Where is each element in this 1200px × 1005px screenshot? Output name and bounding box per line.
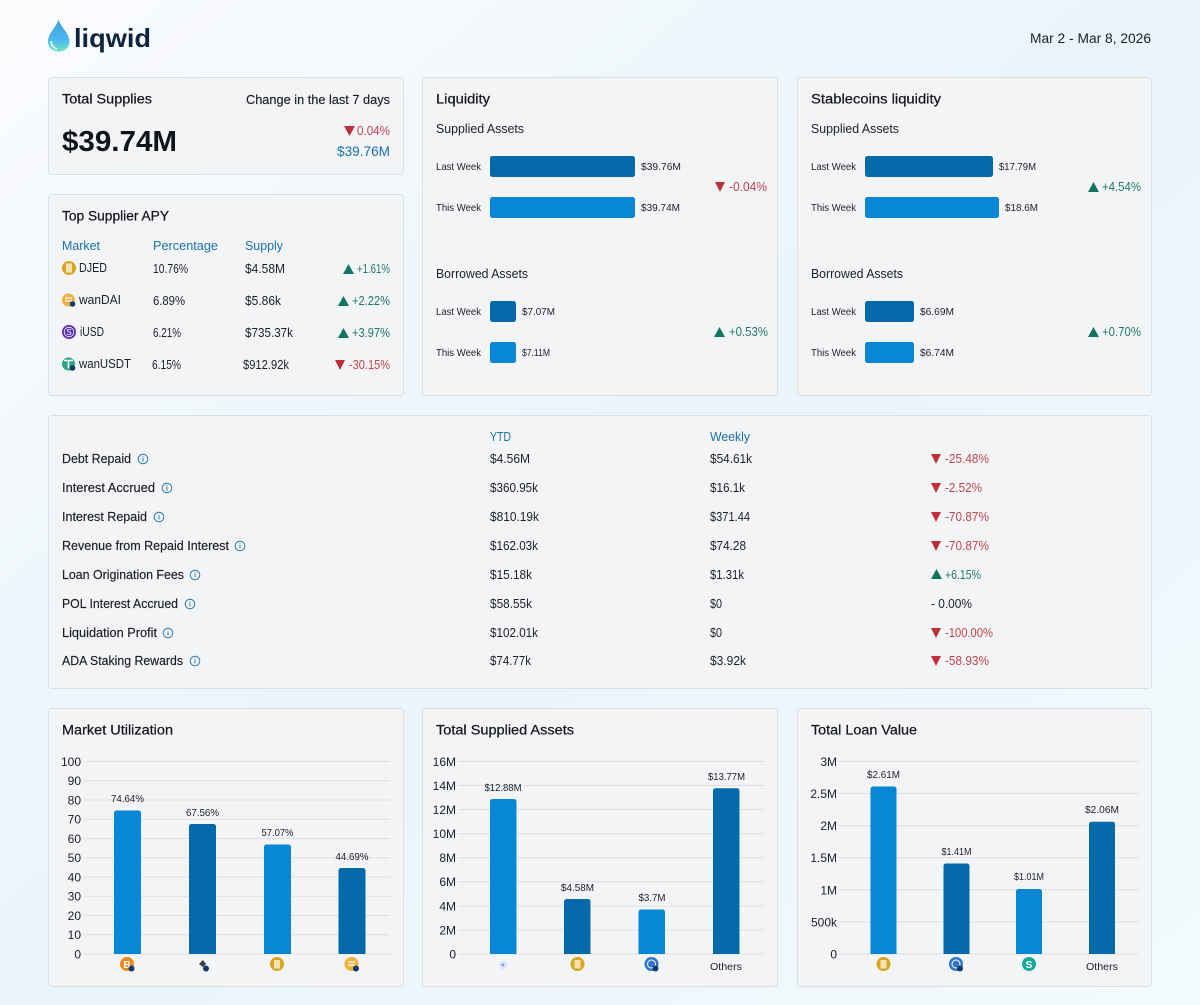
row: wanUSDT: $912.92k	[243, 358, 290, 372]
row: wanDAI: +2.22%	[352, 294, 390, 308]
row: ADA staking rewards: $3.92k	[710, 654, 747, 668]
row: DJED	[62, 261, 390, 276]
bar chart: market utilization: 60	[68, 832, 81, 846]
bar chart: total supplied assets: 14M	[433, 779, 456, 793]
x-axis token icons and label: Others	[710, 961, 742, 973]
x-axis token icons and label: Others	[1086, 961, 1118, 973]
row: revenue from repaid interest	[62, 539, 989, 553]
row: wanUSDT	[62, 357, 390, 372]
change: supplied	[1088, 180, 1141, 194]
change down	[344, 124, 390, 138]
row: wanDAI: 6.89%	[153, 294, 185, 308]
bar chart: market utilization: 80	[68, 794, 81, 808]
icon: water drop	[48, 19, 70, 52]
bar chart: total supplied assets	[433, 755, 764, 973]
row: iUSD: +3.97%	[352, 326, 390, 340]
bar chart: market utilization: 90	[68, 774, 81, 788]
panel: liquidity	[422, 78, 778, 396]
change: borrowed: +0.53%	[729, 325, 768, 339]
previous value: $39.76M	[337, 143, 390, 159]
bar chart: total loan value: $2.61M	[867, 769, 900, 781]
bar chart: total supplied assets: 2M	[439, 924, 456, 938]
row: interest accrued: Interest Accrued	[62, 481, 155, 495]
row: POL interest accrued: POL Interest Accrued	[62, 597, 178, 611]
bar: supplied last week: $17.79M	[999, 161, 1036, 173]
row: DJED: +1.61%	[357, 262, 390, 276]
row: loan origination fees	[62, 568, 981, 582]
row: ADA staking rewards	[62, 654, 989, 668]
bar chart: market utilization	[61, 755, 390, 972]
row: wanDAI: wanDAI	[78, 293, 121, 307]
bar: borrowed last week: Last Week	[811, 306, 857, 318]
sub-heading: borrowed assets: Borrowed Assets	[436, 267, 528, 281]
bar: supplied this week: This Week	[811, 202, 857, 214]
bar chart: total supplied assets: $13.77M	[708, 771, 745, 783]
row: wanUSDT: wanUSDT	[78, 357, 131, 371]
bar: borrowed last week: $6.69M	[920, 306, 954, 318]
bar chart: total loan value: $1.01M	[1014, 871, 1044, 883]
bar chart: market utilization: 44.69%	[336, 851, 368, 863]
bar: supplied last week: Last Week	[436, 161, 482, 173]
row: interest accrued	[62, 481, 982, 495]
bar: supplied last week: Last Week	[811, 161, 857, 173]
heading: Total Supplied Assets	[436, 722, 574, 738]
column headers	[490, 430, 751, 444]
bar chart: market utilization: 100	[61, 755, 81, 769]
bar chart: total loan value: 3M	[820, 755, 837, 769]
bar chart: market utilization: 50	[68, 851, 81, 865]
bar chart: market utilization: 67.56%	[186, 807, 219, 819]
table header: Supply	[245, 239, 284, 253]
row: interest repaid: $371.44	[710, 510, 750, 524]
change: supplied: -0.04%	[729, 180, 767, 194]
row: iUSD: iUSD	[80, 325, 104, 339]
row: revenue from repaid interest: Revenue from Repaid Interest	[62, 539, 230, 553]
panel: total supplies	[48, 78, 404, 174]
row: revenue from repaid interest: -70.87%	[945, 539, 989, 553]
bar chart: market utilization: 0	[74, 948, 81, 962]
row: iUSD: 6.21%	[153, 326, 181, 340]
bar chart: total loan value: 500k	[811, 916, 838, 930]
row: iUSD: $735.37k	[245, 326, 294, 340]
bar chart: total supplied assets: 12M	[433, 803, 456, 817]
bar: supplied last week: $39.76M	[641, 161, 681, 173]
row: interest repaid: -70.87%	[945, 510, 989, 524]
total supplies value: $39.74M	[62, 126, 177, 158]
bar: borrowed this week: $7.11M	[522, 347, 550, 359]
bar: borrowed last week: $7.07M	[522, 306, 555, 318]
bar: supplied this week	[436, 197, 680, 218]
row: POL interest accrued	[62, 597, 972, 611]
row: loan origination fees: +6.15%	[945, 568, 981, 582]
bar chart: market utilization: 10	[68, 928, 81, 942]
heading: Top Supplier APY	[62, 208, 169, 224]
table header	[62, 239, 284, 253]
bar: borrowed last week: Last Week	[436, 306, 482, 318]
bar: supplied this week	[811, 197, 1038, 218]
bar chart: total supplied assets: 16M	[433, 755, 456, 769]
bar chart: total supplied assets: 6M	[439, 875, 456, 889]
bar chart: total loan value: 2.5M	[810, 787, 837, 801]
table header: Market	[62, 239, 101, 253]
x-axis token icons and label: S	[1026, 960, 1033, 971]
row: DJED: DJED	[79, 261, 107, 275]
bar chart: total loan value: 0	[830, 948, 837, 962]
row: loan origination fees: Loan Origination Fees	[62, 568, 184, 582]
x-axis token icons: B	[123, 960, 131, 971]
bar chart: total loan value: 2M	[820, 819, 837, 833]
bar chart: market utilization: 20	[68, 909, 81, 923]
bar chart: total supplied assets: 4M	[439, 900, 456, 914]
row: debt repaid: $4.56M	[490, 452, 530, 466]
bar chart: market utilization: 57.07%	[262, 827, 294, 839]
logo: liqwid	[48, 19, 151, 53]
heading: Liquidity	[436, 92, 490, 106]
bar: borrowed this week: This Week	[811, 347, 857, 359]
bar: borrowed last week	[436, 301, 555, 322]
row: revenue from repaid interest: $74.28	[710, 539, 746, 553]
row: POL interest accrued: - 0.00%	[931, 597, 972, 611]
panel: total supplied assets	[422, 708, 778, 986]
heading: Stablecoins liquidity	[811, 92, 941, 106]
row: debt repaid: $54.61k	[710, 452, 753, 466]
date range: Mar 2 - Mar 8, 2026	[1030, 31, 1151, 46]
panel: market utilization	[48, 708, 404, 986]
row: POL interest accrued: $58.55k	[490, 597, 533, 611]
row: interest repaid: Interest Repaid	[62, 510, 147, 524]
row: liquidation profit: $0	[710, 626, 722, 640]
bar: supplied this week: $18.6M	[1005, 202, 1038, 214]
bar: borrowed this week: This Week	[436, 347, 482, 359]
bar: borrowed last week	[811, 301, 954, 322]
change: supplied: +4.54%	[1102, 180, 1141, 194]
bar chart: total supplied assets: $3.7M	[638, 892, 666, 904]
x-axis token icons and label	[876, 957, 1118, 973]
row: loan origination fees: $1.31k	[710, 568, 745, 582]
row: interest repaid: $810.19k	[490, 510, 540, 524]
row: wanUSDT: -30.15%	[349, 358, 390, 372]
x-axis token icons and label	[498, 957, 742, 973]
x-axis token icons	[120, 957, 359, 972]
column headers: YTD	[490, 430, 511, 444]
bar chart: total loan value: $1.41M	[942, 846, 972, 858]
row: liquidation profit: $102.01k	[490, 626, 539, 640]
panel: stablecoins liquidity	[798, 78, 1152, 396]
bar: borrowed this week	[811, 342, 954, 363]
row: wanUSDT: 6.15%	[152, 358, 181, 372]
bar chart: market utilization: 30	[68, 890, 81, 904]
row: liquidation profit	[62, 626, 993, 640]
sub-heading: supplied assets: Supplied Assets	[436, 122, 524, 136]
bar chart: total loan value: $2.06M	[1085, 804, 1119, 816]
heading: Total Supplies	[62, 92, 152, 106]
table header: Percentage	[153, 239, 218, 253]
bar chart: total supplied assets: 8M	[439, 851, 456, 865]
row: POL interest accrued: $0	[710, 597, 722, 611]
row: interest accrued: $16.1k	[710, 481, 746, 495]
row: liquidation profit: Liquidation Profit	[62, 626, 158, 640]
bar: supplied this week: $39.74M	[641, 202, 680, 214]
bar chart: total supplied assets: $12.88M	[484, 782, 522, 794]
bar: borrowed this week	[436, 342, 550, 363]
row: interest accrued: $360.95k	[490, 481, 539, 495]
change down: 0.04%	[357, 124, 390, 138]
bar: supplied last week	[436, 156, 681, 177]
bar: supplied last week	[811, 156, 1036, 177]
bar chart: total loan value	[810, 755, 1139, 973]
bar chart: total supplied assets: 0	[449, 948, 456, 962]
row: iUSD: S	[66, 328, 72, 337]
change: borrowed	[714, 325, 768, 339]
row: revenue from repaid interest: $162.03k	[490, 539, 539, 553]
sub-heading: supplied assets: Supplied Assets	[811, 122, 899, 136]
row: ADA staking rewards: $74.77k	[490, 654, 532, 668]
bar chart: market utilization: 70	[68, 812, 81, 826]
row: liquidation profit: -100.00%	[945, 626, 993, 640]
bar chart: total supplied assets: 10M	[433, 827, 456, 841]
row: debt repaid: -25.48%	[945, 452, 989, 466]
panel: total loan value	[798, 708, 1152, 986]
panel: top supplier APY	[48, 194, 404, 396]
bar: supplied this week: This Week	[436, 202, 482, 214]
row: DJED: 10.76%	[153, 262, 188, 276]
change: borrowed	[1088, 325, 1141, 339]
row: DJED: $4.58M	[245, 262, 285, 276]
bar chart: total supplied assets: $4.58M	[561, 882, 594, 894]
bar chart: market utilization: 74.64%	[111, 793, 144, 805]
bar: borrowed this week: $6.74M	[920, 347, 954, 359]
bar chart: total loan value: 1M	[820, 884, 837, 898]
row: ADA staking rewards: ADA Staking Rewards	[62, 654, 183, 668]
row: iUSD	[62, 325, 390, 340]
bar chart: market utilization: 40	[68, 870, 81, 884]
row: interest accrued: -2.52%	[945, 481, 982, 495]
row: interest repaid	[62, 510, 989, 524]
column headers: Weekly	[710, 430, 751, 444]
change caption: Change in the last 7 days	[246, 93, 390, 107]
row: debt repaid	[62, 452, 989, 466]
row: wanDAI	[62, 293, 390, 308]
row: debt repaid: Debt Repaid	[62, 452, 131, 466]
change: borrowed: +0.70%	[1102, 325, 1141, 339]
row: wanDAI: $5.86k	[245, 294, 282, 308]
row: ADA staking rewards: -58.93%	[945, 654, 989, 668]
sub-heading: borrowed assets: Borrowed Assets	[811, 267, 903, 281]
heading: Total Loan Value	[811, 722, 917, 738]
bar chart: total loan value: 1.5M	[810, 851, 837, 865]
wordmark: liqwid	[74, 23, 151, 53]
panel: metrics table	[48, 416, 1152, 688]
heading: Market Utilization	[62, 722, 173, 738]
row: loan origination fees: $15.18k	[490, 568, 533, 582]
